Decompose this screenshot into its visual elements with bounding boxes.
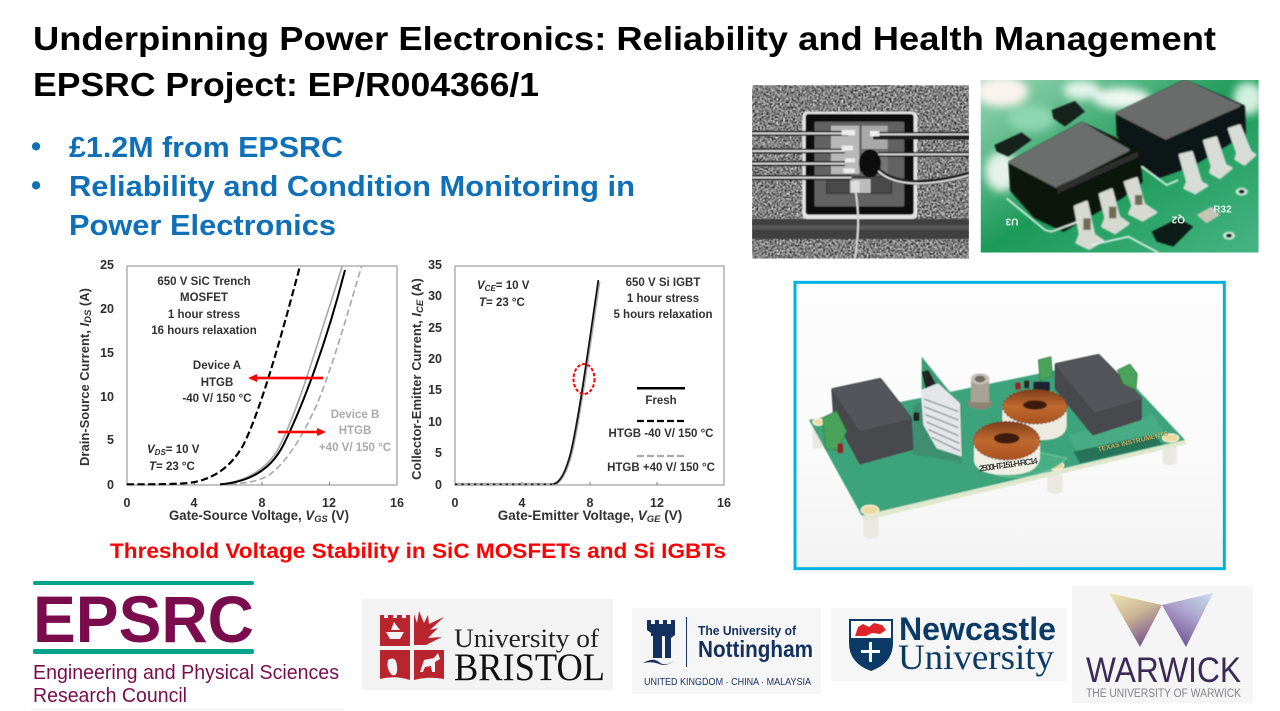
- annotation: test conditions: 16 hours relaxation: [151, 325, 257, 337]
- bullet list: [31, 131, 635, 242]
- logo: University of Warwick: WARWICK: [1086, 651, 1241, 690]
- rear toroid: [1002, 410, 1067, 440]
- legend: HTGB -40 V/ 150 °C: [609, 428, 713, 440]
- annotation: test conditions: [151, 276, 257, 337]
- annotation: VDS and temperature: T= 23 °C: [149, 461, 195, 473]
- logo: University of Warwick: [1072, 586, 1253, 703]
- bullet list: Reliability and Condition Monitoring in: [69, 171, 635, 203]
- y axis title: Drain-Source Current, I: [77, 323, 92, 466]
- green terminals: [823, 357, 1137, 450]
- vertical daughter card: [922, 357, 963, 465]
- x tick labels: 12: [322, 496, 336, 510]
- x tick labels: [124, 496, 404, 510]
- ti label strip: [1073, 434, 1163, 463]
- w mark: [1109, 593, 1213, 647]
- logo: University of Nottingham: Nottingham: [698, 636, 813, 662]
- heatsink: [921, 383, 962, 457]
- annotation: VCE and temperature: CE: [485, 284, 496, 293]
- x tick labels: 8: [259, 496, 266, 510]
- y tick labels: 10: [428, 415, 442, 429]
- logo: University of Nottingham: The University of: [698, 623, 797, 638]
- annotation: device A: -40 V/ 150 °C: [182, 393, 252, 405]
- title: EPSRC Project: EP/R004366/1: [33, 67, 539, 104]
- arrow: right shift: [278, 428, 326, 436]
- y axis title: (A): [409, 278, 424, 300]
- photo panel: converter evaluation board: TEXAS INSTRUMENTS: [1097, 430, 1170, 454]
- annotation: test conditions: [613, 277, 713, 321]
- y tick labels: 35: [428, 258, 442, 272]
- y tick labels: 5: [435, 446, 442, 460]
- annotation: test conditions: 5 hours relaxation: [613, 309, 713, 321]
- bnc connector: [968, 373, 992, 409]
- y tick labels: [428, 258, 442, 492]
- photo: SMD packages on green circuit board: R32: [1213, 204, 1232, 215]
- y tick labels: 20: [100, 302, 114, 316]
- logo: University of Nottingham: [632, 608, 821, 694]
- annotation: test conditions: 1 hour stress: [627, 293, 699, 305]
- annotation: VCE and temperature: T= 23 °C: [479, 297, 525, 309]
- logo: EPSRC: Research Council: [33, 685, 187, 707]
- bullet list: £1.2M from EPSRC: [69, 132, 343, 164]
- annotation: device A: HTGB: [201, 377, 233, 389]
- bullet list: •: [31, 170, 41, 202]
- front chip: [1010, 123, 1141, 230]
- photo panel: converter evaluation board: [795, 282, 1224, 569]
- x tick labels: 0: [452, 496, 459, 510]
- chart caption: Threshold Voltage Stability in SiC MOSFETs and Si IGBTs: [110, 540, 726, 563]
- y tick labels: 15: [428, 383, 442, 397]
- left gray block: [833, 380, 912, 462]
- logo: University of Bristol: [362, 599, 613, 690]
- bullet list: Power Electronics: [69, 210, 336, 242]
- shield: [849, 619, 893, 671]
- annotation: VDS and temperature: [147, 444, 200, 473]
- logo: EPSRC: Engineering and Physical Sciences: [33, 662, 339, 684]
- photo: SMD packages on green circuit board: U3: [1005, 215, 1018, 226]
- curve: device A fresh: [220, 270, 345, 484]
- x tick labels: 12: [650, 496, 664, 510]
- photo: SMD packages on green circuit board: Q2: [1171, 214, 1185, 225]
- castle icon: [643, 620, 675, 665]
- logo: Newcastle University: [831, 608, 1067, 681]
- logo: Newcastle University: University: [898, 637, 1054, 677]
- x axis title: GS: [314, 514, 328, 525]
- annotation: VDS and temperature: = 10 V: [166, 444, 200, 456]
- chart: SiC MOSFET transfer curves: [77, 258, 404, 525]
- rear chip: [1117, 81, 1244, 177]
- gold pads: [813, 419, 1179, 515]
- annotation: device A: Device A: [193, 360, 241, 372]
- annotation: device B: +40 V/ 150 °C: [319, 442, 391, 454]
- logo: University of Bristol: University of: [454, 624, 599, 653]
- x axis title: GE: [647, 514, 661, 525]
- y tick labels: 30: [428, 289, 442, 303]
- annotation: VDS and temperature: DS: [155, 448, 166, 457]
- curve: device fresh grey: [220, 266, 342, 484]
- logo: University of Bristol: BRISTOL: [454, 646, 605, 689]
- y axis title: CE: [415, 299, 426, 313]
- pcb base: [862, 440, 1187, 521]
- annotation: device B: Device B: [331, 409, 379, 421]
- x axis title: Gate-Source Voltage, V: [169, 508, 314, 523]
- annotation: VCE and temperature: = 10 V: [496, 280, 530, 292]
- annotation: device B: HTGB: [339, 425, 371, 437]
- curve: fresh: [553, 280, 598, 484]
- x axis title: (V): [328, 508, 349, 523]
- logo: University of Warwick: THE UNIVERSITY OF WARWICK: [1086, 688, 1241, 700]
- y tick labels: 25: [100, 258, 114, 272]
- annotation: VDS and temperature: V: [147, 444, 156, 456]
- x tick labels: 0: [124, 496, 131, 510]
- y tick labels: 10: [100, 390, 114, 404]
- y tick labels: 0: [107, 478, 114, 492]
- x tick labels: [452, 496, 731, 510]
- annotation: VCE and temperature: V: [477, 280, 486, 292]
- y axis title: (A): [77, 288, 92, 310]
- front toroid: [974, 443, 1040, 475]
- y axis title: DS: [83, 309, 94, 323]
- y tick labels: [100, 258, 114, 492]
- curve: HTGB -40 V: [455, 380, 584, 484]
- highlight ellipse: [574, 364, 594, 394]
- annotation: test conditions: 650 V SiC Trench: [157, 276, 251, 288]
- x tick labels: 16: [717, 496, 731, 510]
- x axis title: (V): [661, 508, 682, 523]
- logo: EPSRC: EPSRC: [33, 582, 254, 656]
- curve: HTGB +40 V device B: [220, 266, 362, 484]
- annotation: VCE and temperature: [477, 280, 530, 309]
- logo: University of Nottingham: UNITED KINGDOM · CHINA · MALAYSIA: [644, 677, 811, 688]
- annotation: device B: [319, 409, 391, 454]
- ground plane patch: [975, 448, 1067, 477]
- crest: [380, 611, 444, 680]
- chart: Si IGBT transfer curves: [409, 258, 731, 525]
- annotation: test conditions: 650 V Si IGBT: [626, 277, 700, 289]
- photo: SMD packages on green circuit board: [975, 77, 1263, 253]
- title: Underpinning Power Electronics: Reliability and Health Management: [33, 21, 1216, 58]
- right gray block: [1057, 356, 1140, 433]
- bullet list: •: [31, 131, 41, 163]
- standoffs: [813, 428, 1177, 539]
- curve: HTGB +40 V: [455, 282, 599, 484]
- annotation: device A: [182, 360, 252, 405]
- x tick labels: 4: [519, 496, 526, 510]
- y tick labels: 20: [428, 352, 442, 366]
- x tick labels: 8: [587, 496, 594, 510]
- y tick labels: 25: [428, 321, 442, 335]
- y tick labels: 15: [100, 346, 114, 360]
- y tick labels: 0: [435, 478, 442, 492]
- legend: [607, 387, 715, 474]
- logo: Newcastle University: Newcastle: [899, 611, 1056, 647]
- legend: Fresh: [645, 395, 677, 407]
- photo: wire-bonded power die: [752, 85, 969, 259]
- title: [33, 21, 1216, 104]
- y axis title: Collector-Emitter Current, I: [409, 313, 424, 480]
- x axis title: Gate-Emitter Voltage, V: [498, 508, 647, 523]
- arrow: left shift: [248, 374, 323, 382]
- y tick labels: 5: [107, 433, 114, 447]
- x tick labels: 4: [191, 496, 198, 510]
- x tick labels: 16: [390, 496, 404, 510]
- curve: HTGB -40 V device A: [127, 266, 300, 484]
- photo panel: converter evaluation board: 2500HT-151-H-RC14: [978, 455, 1039, 474]
- logo: EPSRC: [31, 581, 341, 710]
- small parts: [1052, 101, 1085, 127]
- annotation: test conditions: 1 hour stress: [168, 309, 240, 321]
- annotation: test conditions: MOSFET: [180, 292, 228, 304]
- legend: HTGB +40 V/ 150 °C: [607, 462, 715, 474]
